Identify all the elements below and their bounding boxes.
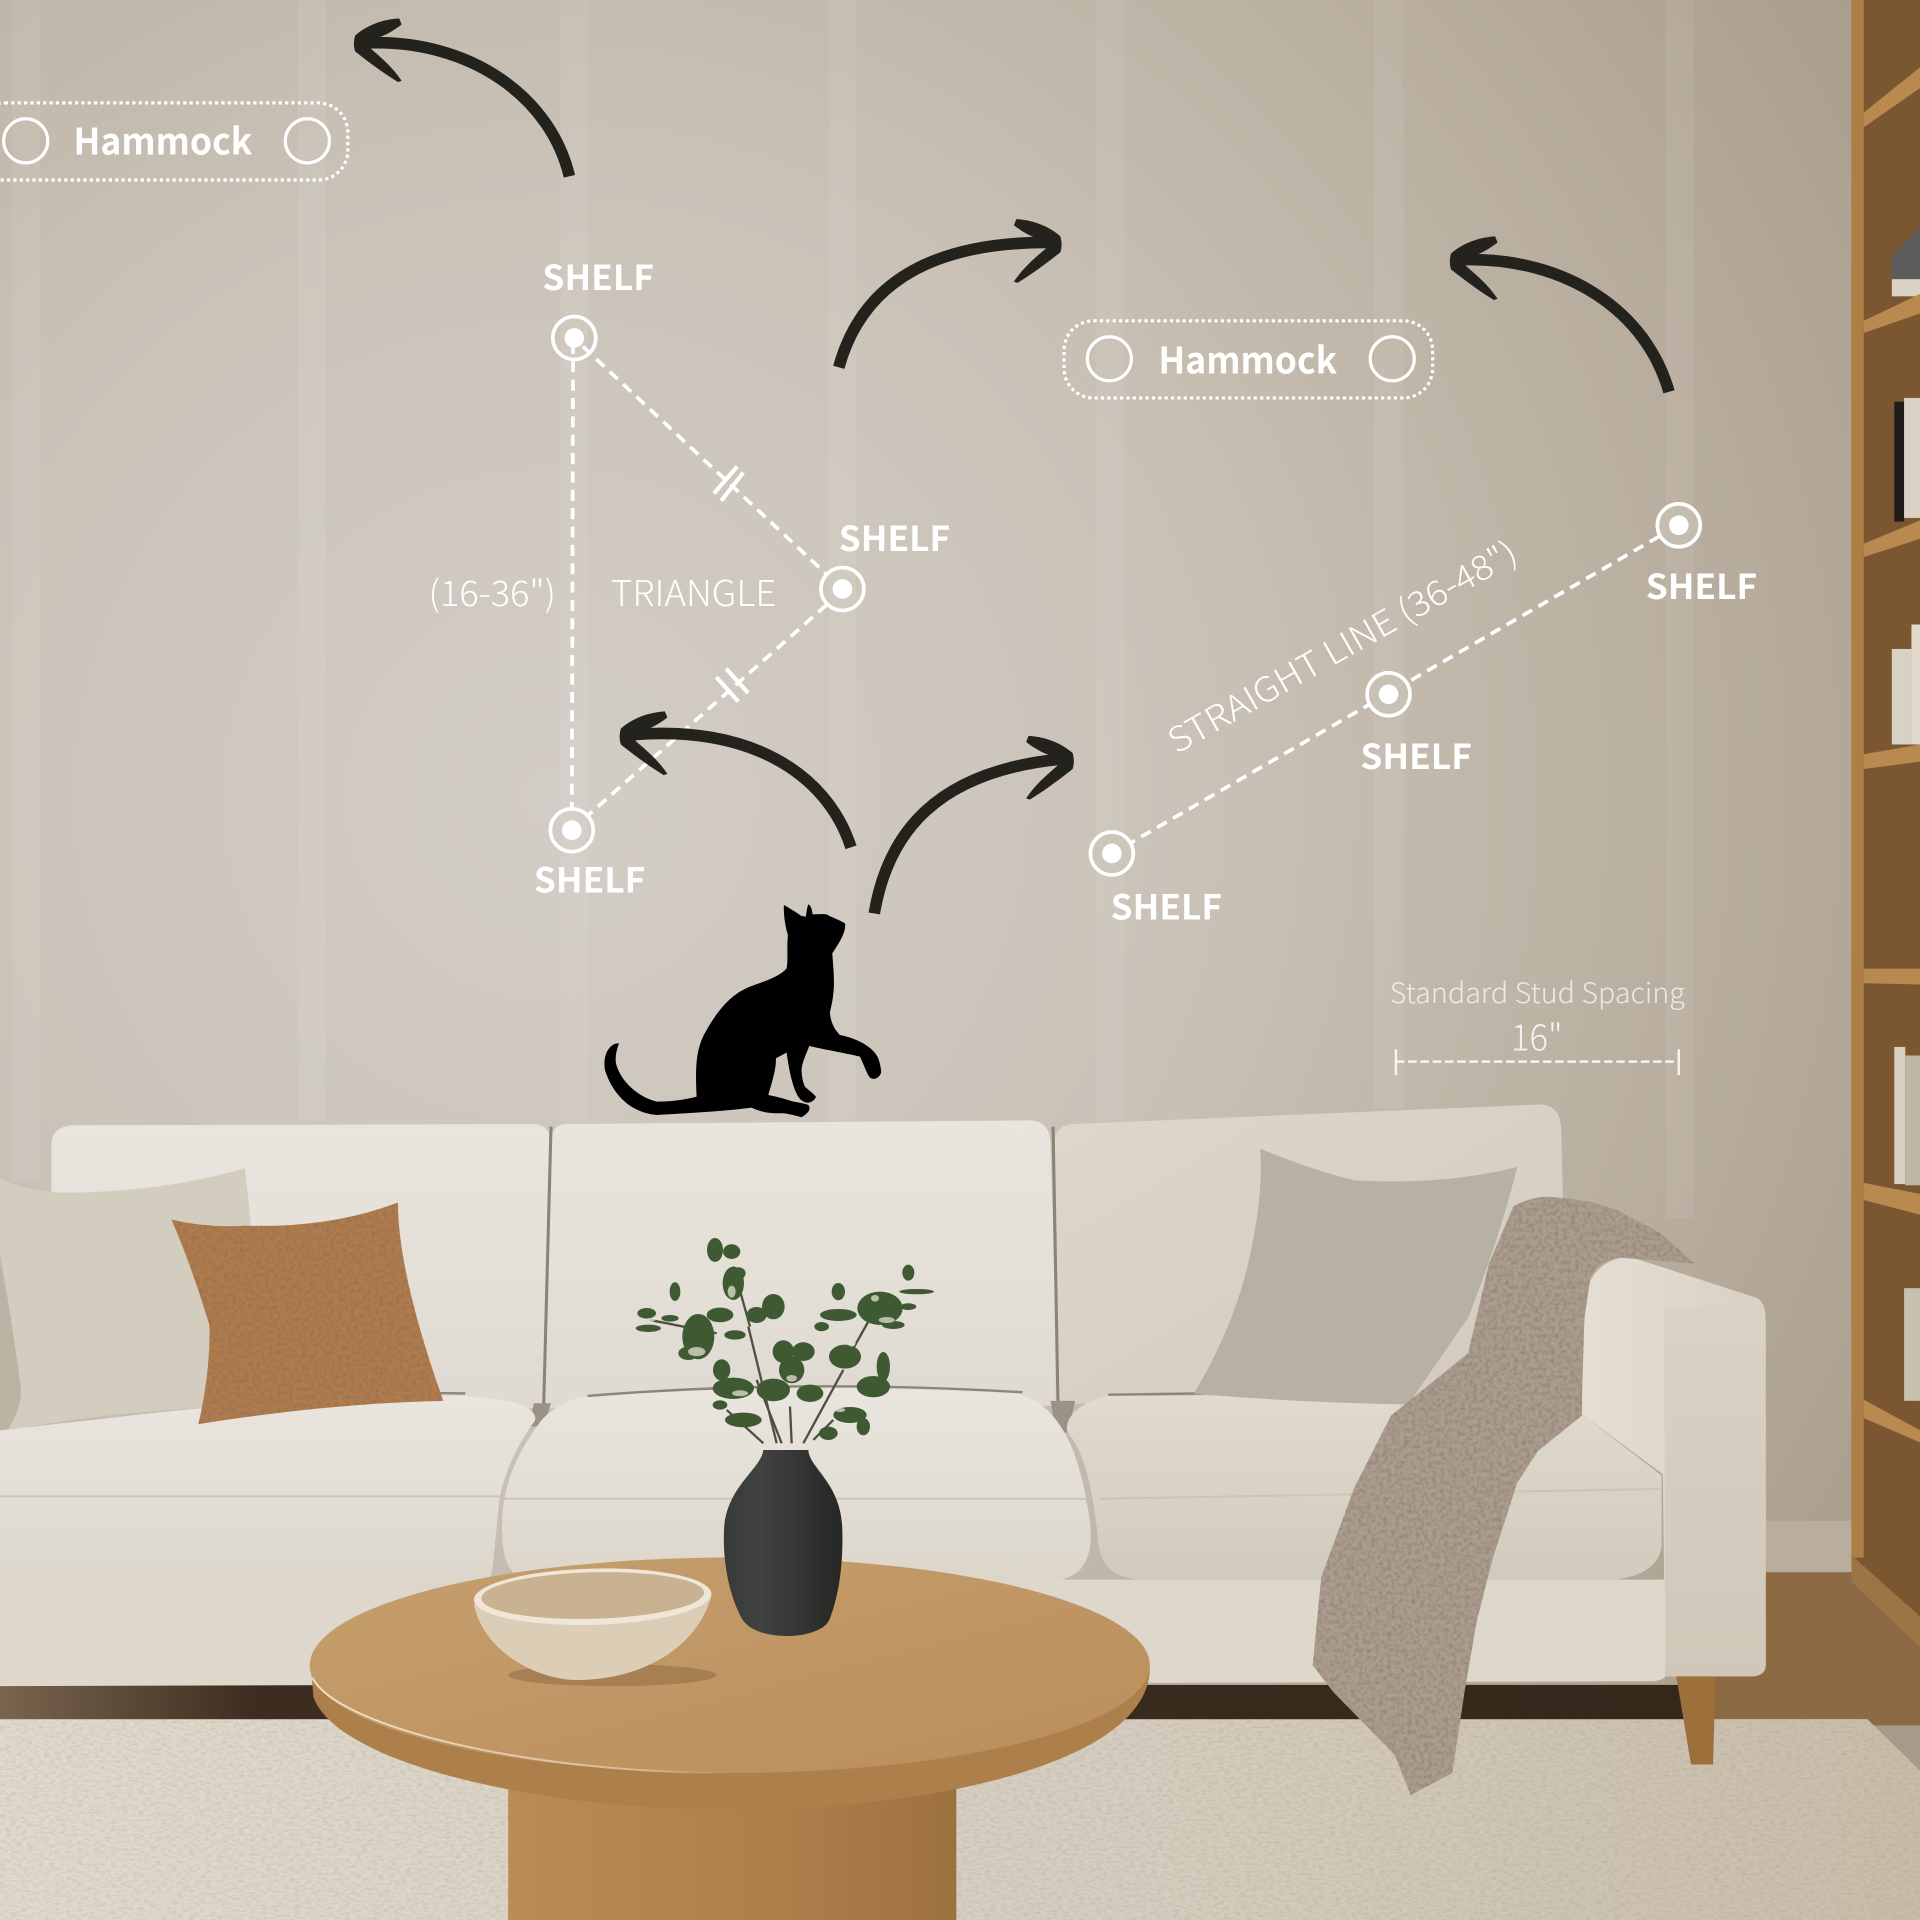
pillow: cream — [0, 1168, 251, 1430]
pillow: grey — [1194, 1149, 1517, 1404]
plant leaf highlights — [645, 1259, 895, 1412]
shelf node 2 — [821, 568, 864, 610]
shelf node 5 — [1367, 673, 1410, 716]
hammock tag left: Hammock — [73, 111, 252, 165]
triangle label: TRIANGLE — [611, 566, 776, 617]
sofa leg — [1676, 1676, 1716, 1764]
stud spacing value: 16" — [1511, 1008, 1562, 1062]
diagram: straight line layout — [1090, 504, 1757, 930]
plant stems — [650, 1267, 877, 1443]
seat gap shadow — [529, 1401, 1075, 1433]
coffee table — [310, 1558, 1150, 1920]
arrow: to right hammock from line — [1450, 236, 1669, 392]
triangle dashed lines — [572, 343, 827, 816]
seat seams — [0, 1489, 1659, 1499]
shelf label: SHELF — [534, 853, 645, 903]
stud spacing label: Standard Stud Spacing — [1390, 971, 1685, 1012]
books — [1892, 227, 1920, 1401]
vase body — [724, 1450, 842, 1636]
shelf label: SHELF — [1360, 729, 1472, 779]
arrow: to right hammock from triangle — [839, 219, 1062, 367]
table pedestal — [508, 1763, 956, 1920]
seat back crease — [24, 1386, 1384, 1420]
shelf label: SHELF — [1646, 559, 1757, 609]
arrow: cat to triangle — [620, 711, 851, 847]
dimension line — [1396, 1049, 1679, 1075]
shelves — [1864, 67, 1920, 1442]
pillow: terracotta — [171, 1202, 443, 1424]
equal-length ticks — [714, 467, 748, 702]
hammock tag right: Hammock — [1158, 330, 1337, 384]
straight line label: STRAIGHT LINE (36-48") — [1157, 525, 1525, 763]
shelf node 3 — [550, 809, 593, 852]
sofa — [0, 1104, 1766, 1764]
straight dashed line — [1131, 536, 1659, 842]
bookcase — [1851, 0, 1920, 1647]
sofa arm — [1582, 1256, 1766, 1676]
sofa left arm edge — [0, 1261, 27, 1433]
stud spacing dimension — [1390, 971, 1685, 1075]
seat cushion middle — [502, 1388, 1091, 1582]
baseboard and floor — [1690, 1521, 1920, 1725]
hammock tag right — [1064, 321, 1433, 398]
vase with plant — [636, 1238, 934, 1636]
sofa under shadow — [0, 1685, 1714, 1719]
sofa base — [0, 1580, 1665, 1686]
cat silhouette — [604, 904, 881, 1117]
table top — [310, 1558, 1150, 1773]
sofa back cushions — [51, 1104, 1565, 1408]
diagram: triangle layout — [429, 250, 950, 903]
arrow: to left hammock — [354, 18, 569, 176]
throw blanket — [1313, 1197, 1695, 1795]
seat cushion right — [1067, 1396, 1662, 1580]
wall stud bands — [12, 0, 1693, 1218]
hammock tag left — [0, 103, 348, 180]
shelf label: SHELF — [542, 250, 654, 300]
arrow: cat to line — [874, 736, 1074, 913]
bowl — [473, 1565, 716, 1686]
plant leaves — [636, 1238, 934, 1440]
table rim highlight — [312, 1678, 730, 1773]
shelf label: SHELF — [839, 511, 950, 561]
shelf node 6 — [1090, 832, 1133, 875]
seat cushion left — [0, 1396, 535, 1589]
shelf label: SHELF — [1111, 880, 1222, 930]
distance label: (16-36") — [429, 566, 556, 617]
rug — [0, 1719, 1920, 1920]
shelf node 1 — [553, 317, 596, 359]
table edge — [311, 1668, 1150, 1810]
shelf node 4 — [1657, 504, 1700, 547]
